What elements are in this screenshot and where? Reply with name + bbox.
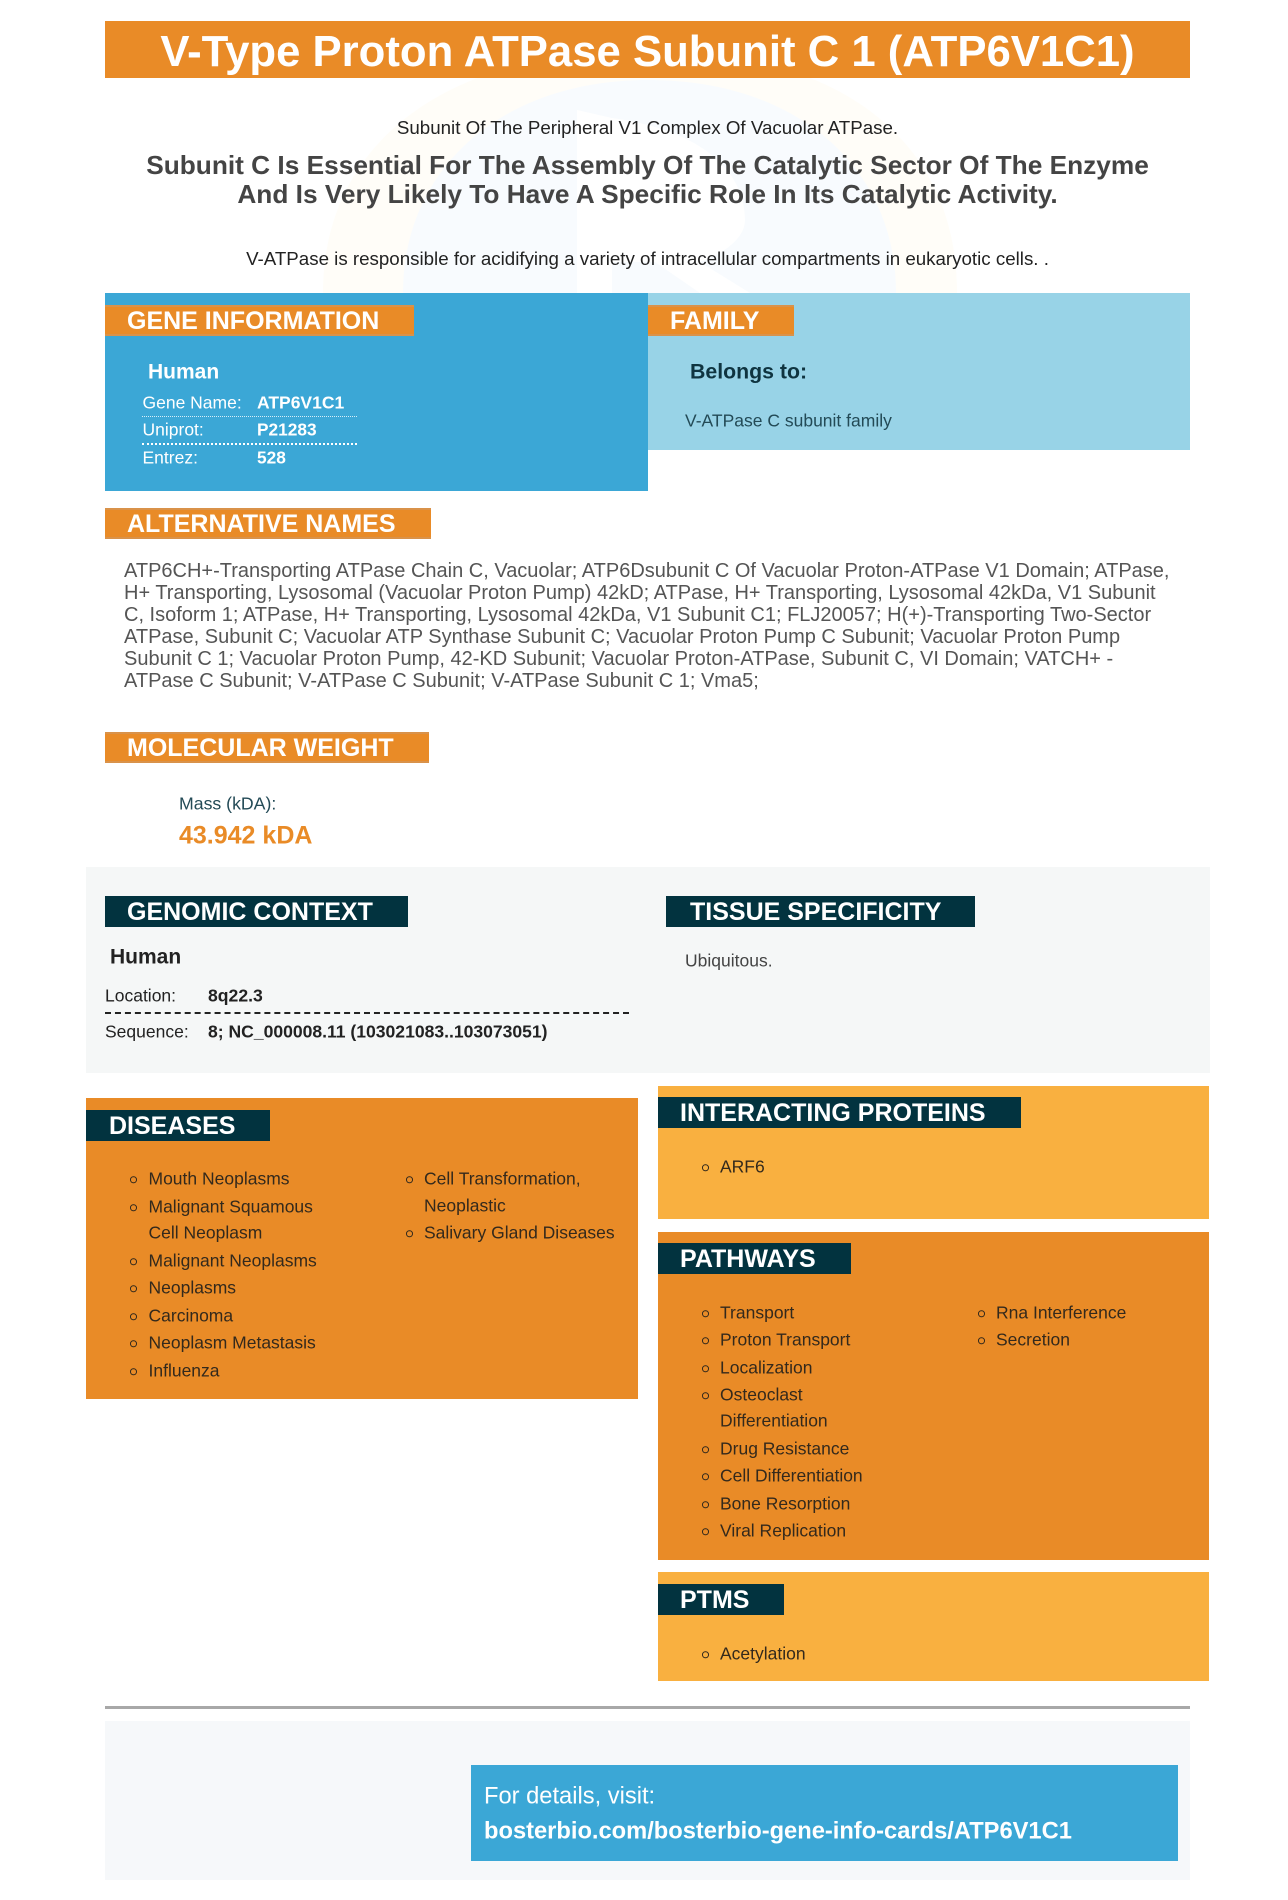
belongs to: Belongs to: [690, 360, 807, 384]
alternative names text: H+ Transporting, Lysosomal (Vacuolar Proton Pump) 42kD; ATPase, H+ Transporting, Lysosomal 42kDa, V1 Subunit [124, 582, 1156, 604]
tissue value: Ubiquitous. [685, 950, 773, 970]
panel: genomic context and tissue specificity: 8; NC_000008.11 (103021083..103073051) [208, 1021, 548, 1041]
heading: ptms: PTMS [680, 1586, 749, 1614]
pathway list: Rna Interference [996, 1302, 1126, 1322]
disease list: Cell Transformation, [424, 1168, 581, 1188]
panel: interacting proteins [658, 1086, 1209, 1219]
panel: gene information [105, 293, 648, 491]
uniprot row: Uniprot: [142, 419, 204, 439]
description: V-ATPase is responsible for acidifying a variety of intracellular compartments in eukaryotic cells. . [246, 248, 1049, 269]
disease list: Neoplastic [424, 1195, 506, 1215]
subtitle: Subunit Of The Peripheral V1 Complex Of Vacuolar ATPase. [397, 117, 898, 138]
panel: diseases [86, 1098, 638, 1399]
molecular weight value [179, 793, 312, 850]
pathway list: Cell Differentiation [720, 1465, 863, 1485]
heading: molecular weight: MOLECULAR WEIGHT [127, 734, 394, 762]
footer panel [105, 1721, 1190, 1880]
callout url: bosterbio.com/bosterbio-gene-info-cards/ATP6V1C1 [484, 1818, 1072, 1844]
heading: gene information: GENE INFORMATION [127, 307, 379, 335]
sequence row: Sequence: [105, 1021, 189, 1041]
disease list [130, 1168, 615, 1380]
protein item: ARF6 [720, 1156, 765, 1176]
pathway list [702, 1302, 1126, 1540]
pathway list: Proton Transport [720, 1329, 850, 1349]
alternative names text: ATPase, Subunit C; Vacuolar ATP Synthase Subunit C; Vacuolar Proton Pump C Subunit; Vacuolar Proton Pump [124, 626, 1120, 648]
panel: ptms [658, 1572, 1209, 1681]
species: Human [148, 361, 219, 384]
gene name row: Gene Name: [142, 392, 242, 412]
pathway list: Secretion [996, 1329, 1070, 1349]
panel: gene information: ATP6V1C1 [257, 392, 344, 412]
heading: pathways [658, 1243, 851, 1274]
location row: Location: [105, 985, 176, 1005]
species: Human [110, 946, 181, 969]
alternative names text [124, 560, 1169, 692]
background watermark logo [0, 0, 1288, 300]
callout: details link [471, 1765, 1178, 1861]
pathway list: Differentiation [720, 1410, 828, 1430]
disease list: Malignant Squamous [148, 1196, 313, 1216]
title banner: V-Type Proton ATPase Subunit C 1 (ATP6V1C1) [160, 27, 1135, 76]
heading: diseases: DISEASES [109, 1112, 235, 1140]
disease list: Neoplasm Metastasis [148, 1332, 316, 1352]
heading: tissue specificity: TISSUE SPECIFICITY [690, 898, 941, 926]
ptm item: Acetylation [720, 1643, 806, 1663]
panel: gene information: 528 [257, 448, 286, 468]
bold summary: Subunit C Is Essential For The Assembly Of The Catalytic Sector Of The Enzyme [146, 150, 1149, 180]
disease list: Influenza [148, 1360, 220, 1380]
pathway list: Localization [720, 1357, 812, 1377]
heading: family [648, 305, 794, 336]
heading: genomic context: GENOMIC CONTEXT [127, 898, 373, 926]
disease list: Cell Neoplasm [148, 1222, 262, 1242]
disease list: Neoplasms [148, 1277, 236, 1297]
disease list: Salivary Gland Diseases [424, 1222, 615, 1242]
panel: pathways [658, 1232, 1209, 1560]
heading: pathways: PATHWAYS [680, 1245, 816, 1273]
mass label: Mass (kDA): [179, 793, 276, 813]
heading: ptms [658, 1584, 784, 1615]
disease list: Mouth Neoplasms [148, 1168, 290, 1188]
panel: gene information: P21283 [257, 420, 317, 440]
pathway list: Viral Replication [720, 1520, 846, 1540]
alternative names text: C, Isoform 1; ATPase, H+ Transporting, Lysosomal 42kDa, V1 Subunit C1; FLJ20057; H(+)-Transporting Two-Sector [124, 604, 1151, 626]
callout label: For details, visit: [484, 1783, 655, 1809]
alternative names text: ATP6CH+-Transporting ATPase Chain C, Vacuolar; ATP6Dsubunit C Of Vacuolar Proton-ATPase V1 Domain; ATPase, [124, 560, 1169, 582]
heading: interacting proteins: INTERACTING PROTEINS [680, 1099, 986, 1127]
pathway list: Drug Resistance [720, 1438, 849, 1458]
alternative names text: Subunit C 1; Vacuolar Proton Pump, 42-KD Subunit; Vacuolar Proton-ATPase, Subunit C, VI Domain; VATCH+ - [124, 648, 1113, 670]
divider [105, 1706, 1190, 1709]
panel: genomic context and tissue specificity: 8q22.3 [208, 985, 263, 1005]
bold summary line 2: And Is Very Likely To Have A Specific Role In Its Catalytic Activity. [237, 179, 1058, 209]
pathway list: Osteoclast [720, 1384, 803, 1404]
pathway list: Bone Resorption [720, 1493, 850, 1513]
entrez row: Entrez: [142, 447, 198, 467]
heading: diseases [86, 1110, 270, 1141]
panel: family [648, 293, 1190, 450]
intro text [146, 117, 1149, 269]
heading: alternative names: ALTERNATIVE NAMES [127, 510, 396, 538]
family value: V-ATPase C subunit family [685, 410, 892, 430]
panel: genomic context and tissue specificity [86, 867, 1210, 1073]
disease list: Malignant Neoplasms [148, 1250, 317, 1270]
pathway list: Transport [720, 1302, 794, 1322]
disease list: Carcinoma [148, 1305, 233, 1325]
heading: family: FAMILY [670, 307, 759, 335]
alternative names text: ATPase C Subunit; V-ATPase C Subunit; V-ATPase Subunit C 1; Vma5; [124, 670, 759, 692]
mass value: 43.942 kDA [179, 822, 312, 850]
